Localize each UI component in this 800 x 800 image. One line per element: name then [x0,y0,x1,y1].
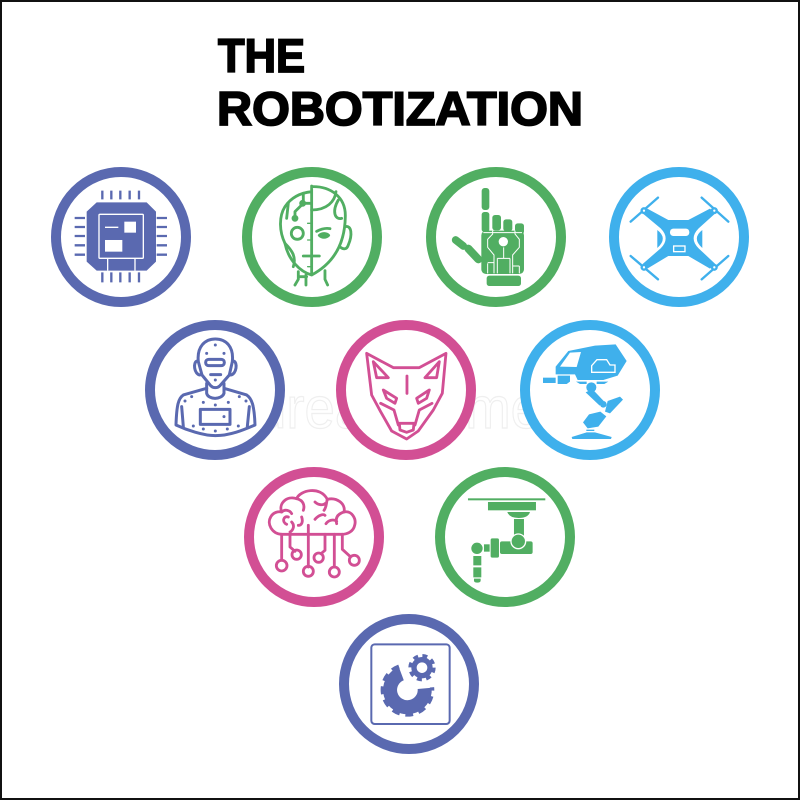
icon: gears in square [371,644,450,724]
icon: mech robot [543,344,627,439]
badge: android bust [150,325,280,455]
icon: quadcopter drone [631,198,728,279]
badge: AI brain [249,472,379,602]
icon: wolf head [367,353,446,439]
title: ROBOTIZATION [217,82,583,135]
badge: processor chip [56,172,186,302]
badge: gears app [344,619,474,749]
icon: android person [176,339,255,436]
badge: robot wolf [341,325,471,455]
icon: chip [75,191,167,282]
icon: half robot face [280,186,351,285]
icon: overhead robot arm [468,498,545,583]
icon: robotic hand [456,188,524,286]
badge: robotic hand [431,172,561,302]
badge: cyborg face [247,172,377,302]
title: THE [218,29,305,82]
icon: circuit brain [269,491,359,577]
badge: drone [614,172,744,302]
watermark: dreamstime [256,376,541,441]
badge: walking mech [525,325,655,455]
title [217,29,583,135]
badge: ceiling robot arm [440,472,570,602]
